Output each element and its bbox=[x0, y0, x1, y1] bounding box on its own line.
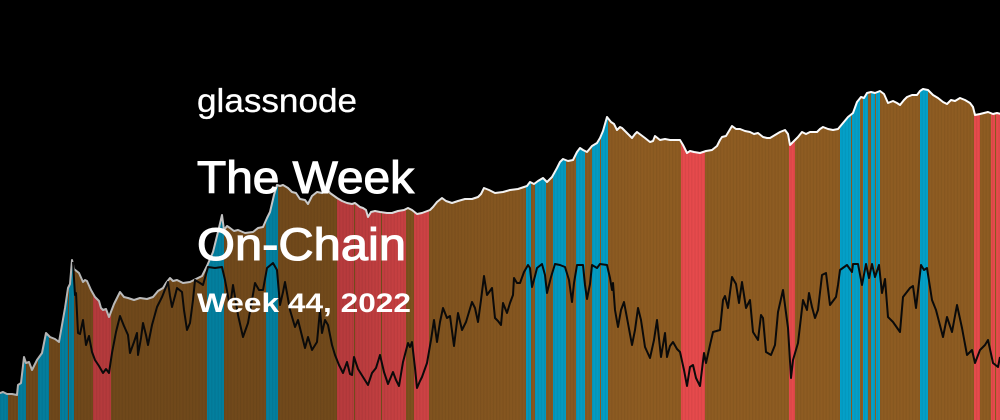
teal bands bbox=[0, 85, 928, 420]
subtitle: Week 44, 2022: Week 44, 2022 bbox=[197, 288, 411, 318]
logo: glassnode: glassnode bbox=[197, 82, 357, 119]
red bands bbox=[93, 100, 1000, 420]
title: On-Chain: On-Chain bbox=[197, 219, 406, 270]
black oscillator line bbox=[73, 262, 1000, 388]
title: The Week: The Week bbox=[197, 152, 415, 203]
